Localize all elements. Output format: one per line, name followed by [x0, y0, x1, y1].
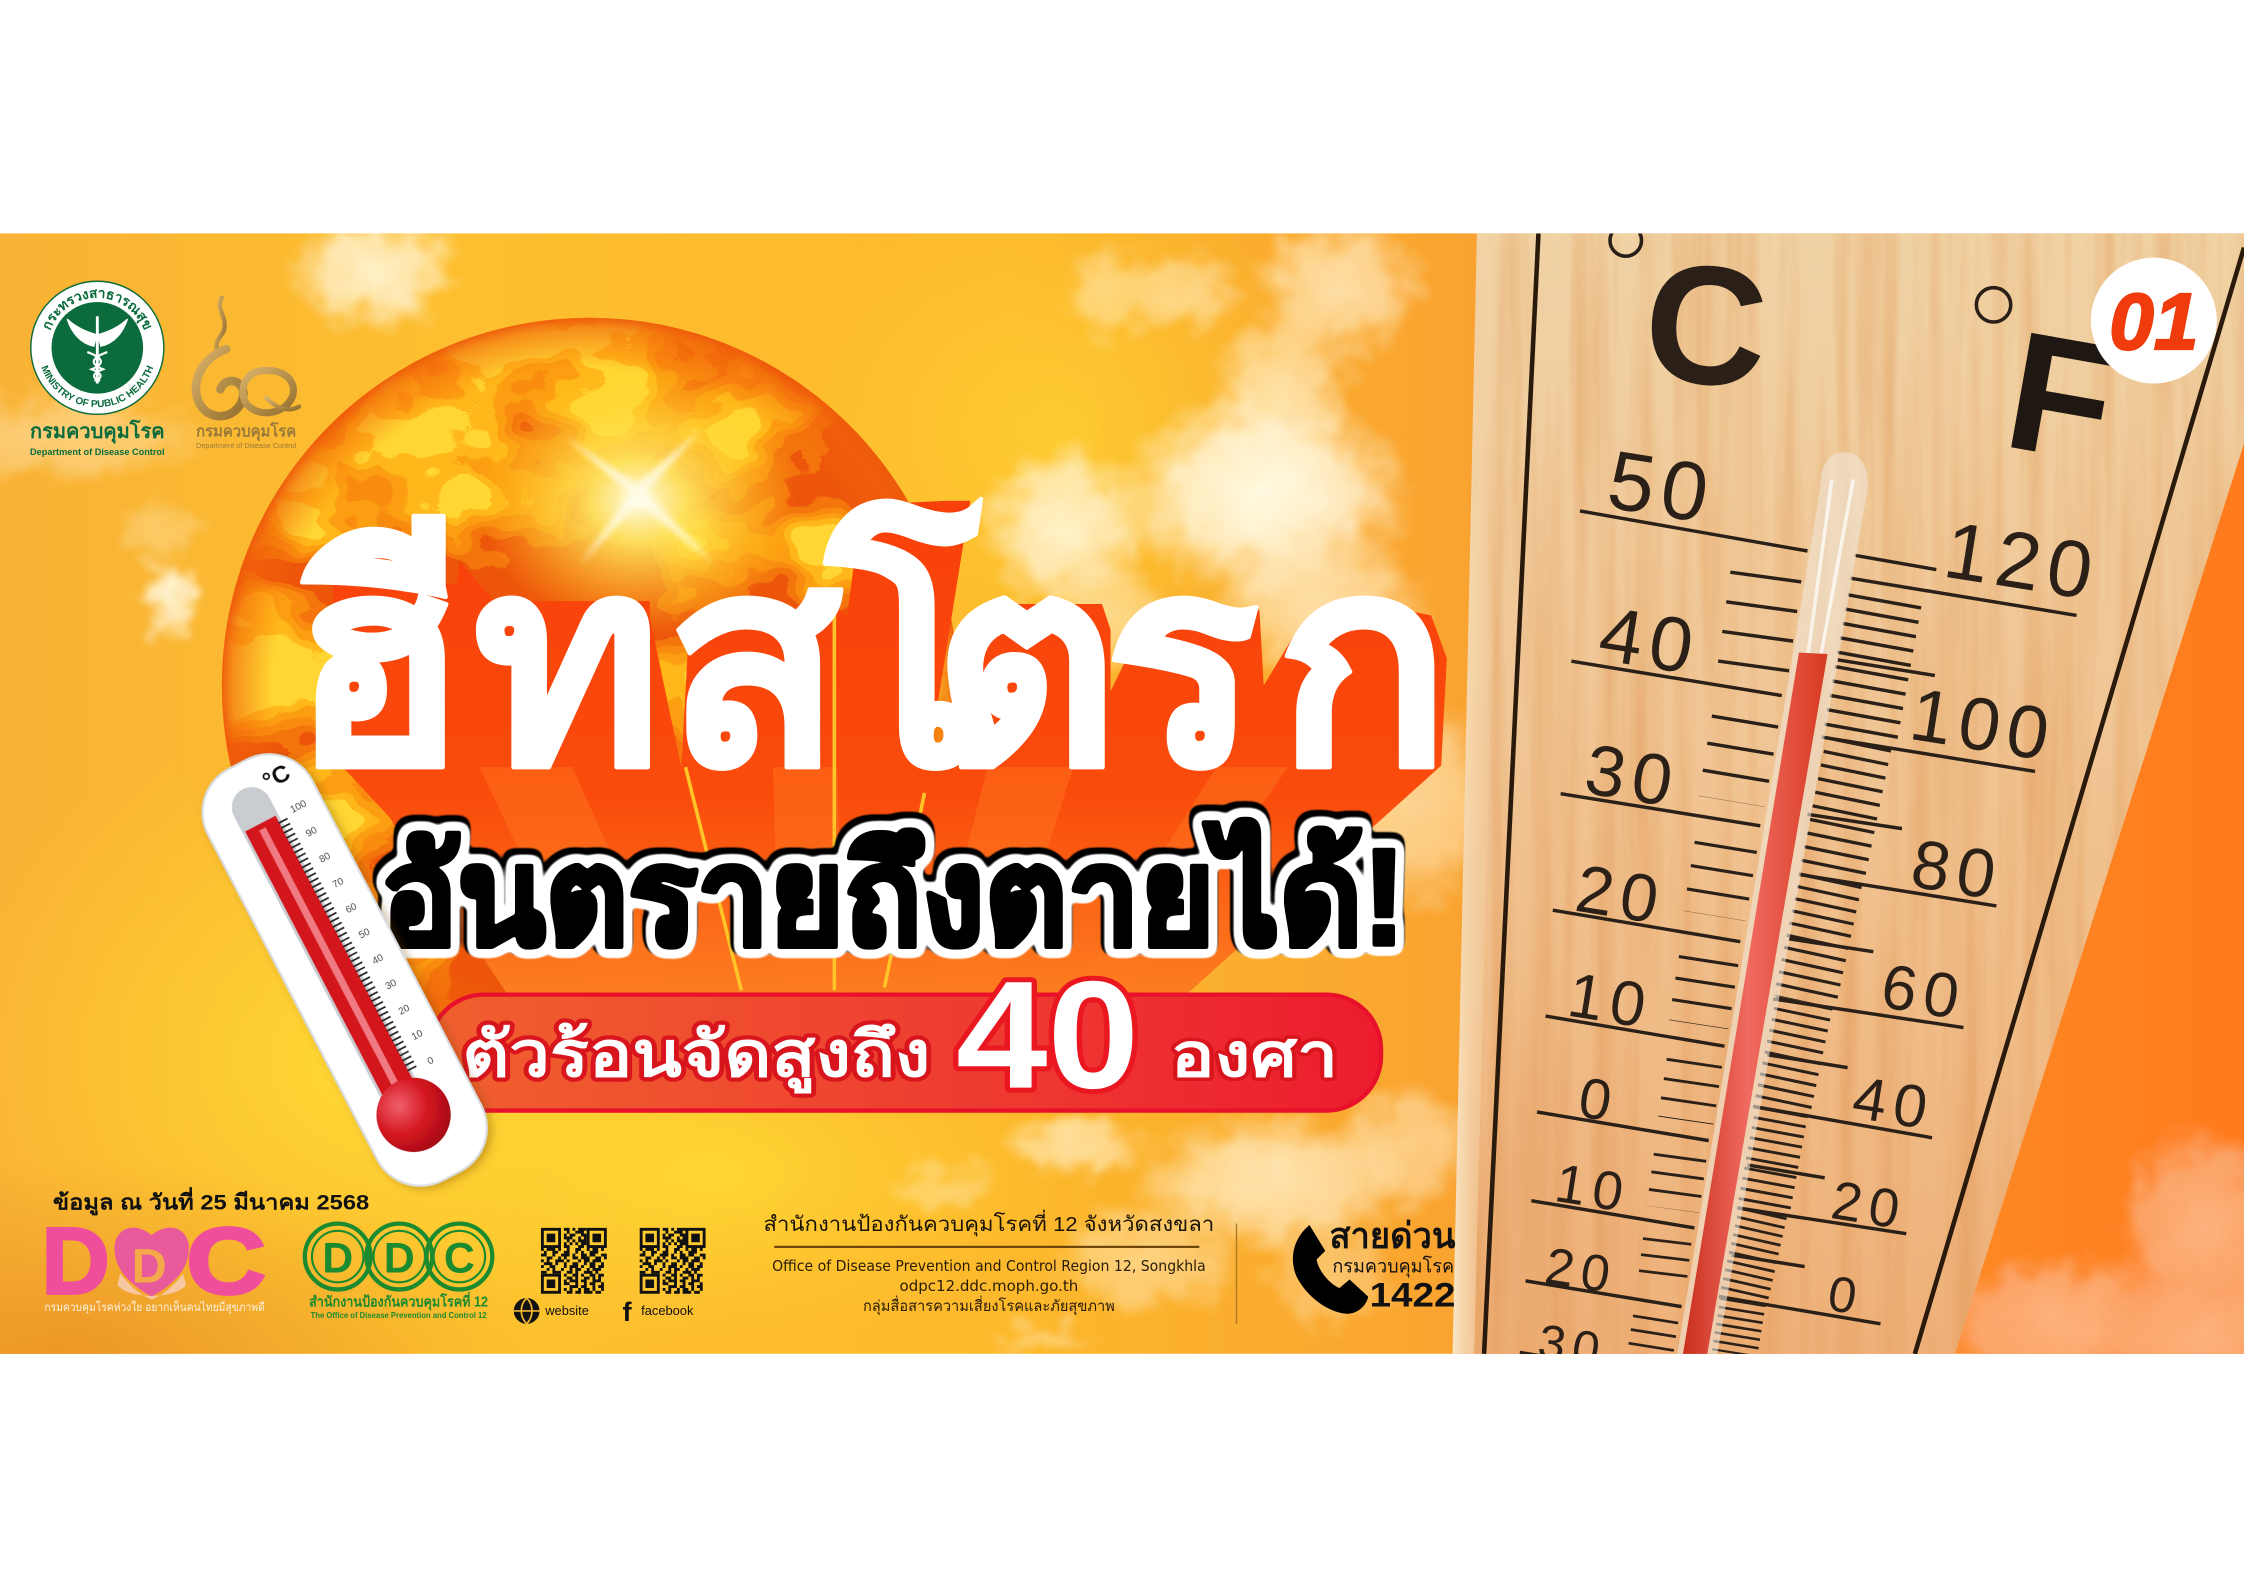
thermometer scale numbers: [289, 798, 441, 1070]
office english name: Office of Disease Prevention and Control Region 12, Songkhla: [772, 1257, 1206, 1275]
QR code website: [541, 1229, 607, 1292]
seal caduceus: [67, 316, 127, 384]
sun: [222, 318, 957, 1053]
fahrenheit numbers: 100: [1905, 672, 2062, 777]
title extruded rays: [333, 501, 1447, 993]
thermometer degree label: °C: [258, 759, 295, 796]
DDC letters: D: [322, 1234, 353, 1282]
celsius minor ticks: [1650, 575, 1766, 1354]
celsius numbers: 40: [1594, 591, 1706, 692]
QR code facebook: [640, 1229, 706, 1292]
title: heatstroke: ร: [1105, 504, 1259, 824]
fahrenheit numbers: 0: [1824, 1265, 1868, 1326]
icon: globe: [514, 1298, 540, 1324]
pill text: 40: 40: [956, 950, 1139, 1121]
title: heatstroke: ท: [474, 504, 662, 824]
thermometer scale numbers: 100: [289, 798, 309, 816]
red liquid: [1683, 653, 1828, 1354]
DDC letters: D: [384, 1234, 415, 1282]
icon: phone: [1293, 1225, 1368, 1314]
hotline: [1293, 1216, 1456, 1315]
thermometer scale numbers: 40: [370, 952, 386, 967]
celsius numbers: 20: [1571, 851, 1671, 939]
thermometer scale numbers: 30: [384, 977, 399, 992]
office thai name: สำนักงานป้องกันควบคุมโรคที่ 12 จังหวัดสงขลา: [764, 1210, 1214, 1237]
DDC letters: [322, 1234, 475, 1282]
hotline label: สายด่วน: [1330, 1216, 1456, 1256]
DDC thai caption: สำนักงานป้องกันควบคุมโรคที่ 12: [309, 1291, 488, 1311]
hotline number: 1422: [1370, 1277, 1455, 1315]
fahrenheit numbers: 80: [1906, 825, 2008, 915]
department english green: Department of Disease Control: [30, 447, 165, 457]
title: heatstroke: ส: [667, 504, 842, 824]
icon: facebook: f: [623, 1296, 633, 1327]
wooden thermometer: F: [1994, 295, 2128, 499]
wood border lines: [1484, 233, 2244, 1354]
fahrenheit major lines: [1719, 555, 2077, 1324]
website label: website: [544, 1303, 589, 1318]
thermometer scale numbers: 50: [357, 927, 373, 942]
celsius major lines: [1520, 511, 1808, 1377]
celsius numbers: 30: [1534, 1315, 1610, 1379]
fahrenheit numbers: 60: [1877, 951, 1971, 1034]
celsius numbers: 10: [1563, 960, 1658, 1042]
thermometer scale numbers: 0: [426, 1055, 436, 1067]
fahrenheit numbers: 120: [1939, 504, 2106, 617]
seal ring english text: MINISTRY OF PUBLIC HEALTH: [41, 365, 154, 408]
banner: [0, 233, 2244, 1354]
data date: ข้อมูล ณ วันที่ 25 มีนาคม 2568: [53, 1186, 369, 1216]
celsius numbers: 10: [1551, 1152, 1635, 1224]
department name gold: กรมควบคุมโรค: [196, 422, 296, 442]
clouds lower right outside: [1932, 1122, 2244, 1410]
title: heatstroke: ต: [933, 504, 1119, 824]
celsius numbers: 30: [1580, 729, 1685, 823]
DOC pink logo: D: [132, 1239, 167, 1293]
clouds: [0, 212, 1510, 1358]
department english gold: Department of Disease Control: [196, 443, 297, 450]
glass tube: [1677, 452, 1868, 1354]
thermometer scale numbers: 60: [344, 901, 359, 916]
department name green: กรมควบคุมโรค: [30, 419, 165, 444]
badge 01: [2091, 258, 2217, 384]
banner gradient background: [0, 233, 2244, 1354]
pill text: degrees: องศา: [1171, 1022, 1338, 1089]
thermometer scale numbers: 90: [304, 825, 320, 840]
ministry of public health seal: [30, 280, 165, 415]
DDC green logo: [305, 1224, 492, 1289]
seal ring text: กระทรวงสาธารณสุข: [44, 289, 152, 330]
wooden thermometer: [1453, 225, 2244, 1379]
title: heatstroke: โ: [823, 494, 984, 824]
thermometer scale numbers: 10: [410, 1028, 425, 1043]
subtitle: deadly danger: อันตรายถึงตายได้!: [381, 819, 1405, 975]
celsius numbers: 0: [1574, 1066, 1623, 1135]
badge 01: 01: [2109, 276, 2198, 366]
DOC pink logo: D: [42, 1209, 110, 1315]
thermometer scale numbers: 20: [397, 1003, 412, 1018]
facebook label: facebook: [641, 1303, 694, 1318]
DOC pink logo: [42, 1209, 266, 1315]
anniversary gold logo: [196, 298, 299, 416]
DOC heart: [114, 1228, 189, 1297]
pill text: high body temperature: ตัวร้อนจัดสูงถึง: [462, 1020, 930, 1094]
DOC pink logo: C: [186, 1209, 266, 1315]
fahrenheit minor ticks: [1735, 600, 1885, 1354]
office unit: กลุ่มสื่อสารความเสี่ยงโรคและภัยสุขภาพ: [863, 1295, 1115, 1316]
office url: odpc12.ddc.moph.go.th: [900, 1277, 1078, 1295]
white thermometer sticker: [201, 752, 496, 1194]
celsius numbers: 20: [1541, 1236, 1621, 1304]
hotline department: กรมควบคุมโรค: [1332, 1255, 1454, 1278]
thermometer scale numbers: 80: [318, 850, 333, 865]
DOC tagline: กรมควบคุมโรคห่วงใย อยากเห็นคนไทยมีสุขภาพดี: [44, 1299, 265, 1314]
fahrenheit numbers: 20: [1827, 1169, 1911, 1241]
title: heatstroke: ฮี: [291, 504, 465, 824]
fahrenheit numbers: [1824, 504, 2106, 1326]
DDC english caption: The Office of Disease Prevention and Control 12: [311, 1310, 487, 1320]
title: heatstroke: ก: [1277, 504, 1450, 824]
celsius numbers: 50: [1602, 433, 1722, 541]
scale letters: C: [1639, 227, 1773, 424]
red pill banner: [436, 976, 1384, 1113]
celsius numbers: [1534, 433, 1722, 1379]
DDC letters: C: [444, 1234, 475, 1282]
thermometer scale numbers: 70: [331, 876, 346, 891]
fahrenheit numbers: 40: [1848, 1064, 1939, 1143]
